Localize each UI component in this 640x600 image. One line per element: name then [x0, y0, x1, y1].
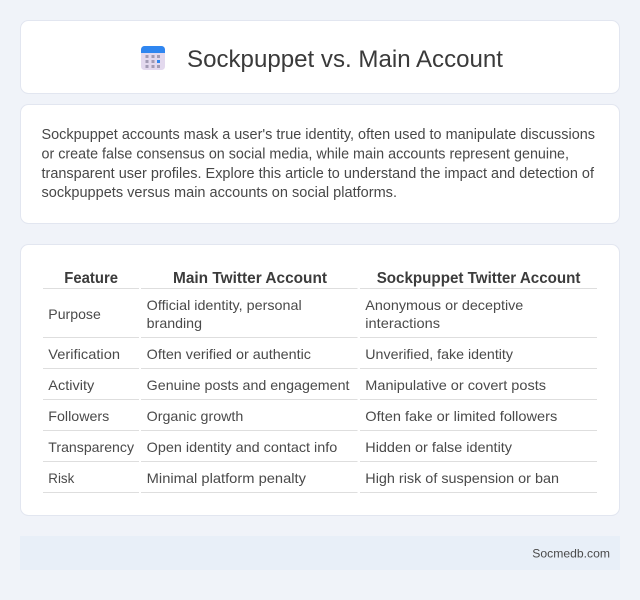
- row: activity: Manipulative or covert posts: [365, 377, 546, 393]
- table header: [64, 270, 581, 287]
- table header: Main Twitter Account: [173, 270, 327, 287]
- row: verification: Often verified or authentic: [147, 346, 311, 362]
- intro paragraph: Sockpuppet accounts mask a user's true identity, often used to manipulate discussions: [42, 127, 595, 143]
- table header: Feature: [64, 270, 118, 287]
- row: activity: [48, 377, 546, 393]
- row: purpose: Purpose: [48, 306, 101, 322]
- footer bar: [20, 536, 620, 570]
- row: risk: High risk of suspension or ban: [365, 470, 559, 486]
- row: risk: Risk: [48, 470, 75, 486]
- row: transparency: Open identity and contact info: [147, 439, 338, 455]
- row: risk: Minimal platform penalty: [147, 470, 306, 486]
- intro paragraph: sockpuppets versus main accounts on social platforms.: [42, 185, 397, 201]
- intro paragraph: or create false consensus on social media, while main accounts represent genuine,: [42, 146, 569, 162]
- footer source text: Socmedb.com: [532, 546, 610, 560]
- row: purpose: Anonymous or deceptive: [365, 297, 524, 313]
- row: purpose: interactions: [365, 315, 440, 331]
- row: purpose: branding: [147, 315, 202, 331]
- row: verification: Verification: [48, 346, 120, 362]
- row: purpose: Official identity, personal: [147, 297, 302, 313]
- panel: title card: [20, 20, 620, 94]
- row: followers: Often fake or limited followers: [365, 408, 557, 424]
- row: followers: [48, 408, 557, 424]
- row: verification: [48, 346, 513, 362]
- row: activity: Activity: [48, 377, 94, 393]
- row: verification: Unverified, fake identity: [365, 346, 513, 362]
- row: transparency: Transparency: [48, 439, 134, 455]
- row: followers: Followers: [48, 408, 109, 424]
- row: transparency: Hidden or false identity: [365, 439, 512, 455]
- panel: comparison table: [20, 244, 620, 516]
- panel: introduction: [20, 104, 620, 224]
- row: risk: [48, 470, 559, 486]
- row: followers: Organic growth: [147, 408, 243, 424]
- table header: Sockpuppet Twitter Account: [377, 270, 580, 287]
- title: Sockpuppet vs. Main Account: [187, 46, 503, 73]
- icon: calendar: [141, 46, 165, 70]
- row: activity: Genuine posts and engagement: [147, 377, 350, 393]
- row: transparency: [48, 439, 512, 455]
- intro paragraph: [42, 127, 595, 201]
- row: purpose: [48, 297, 524, 331]
- intro paragraph: transparent user profiles. Explore this article to understand the impact and detection of: [42, 166, 595, 182]
